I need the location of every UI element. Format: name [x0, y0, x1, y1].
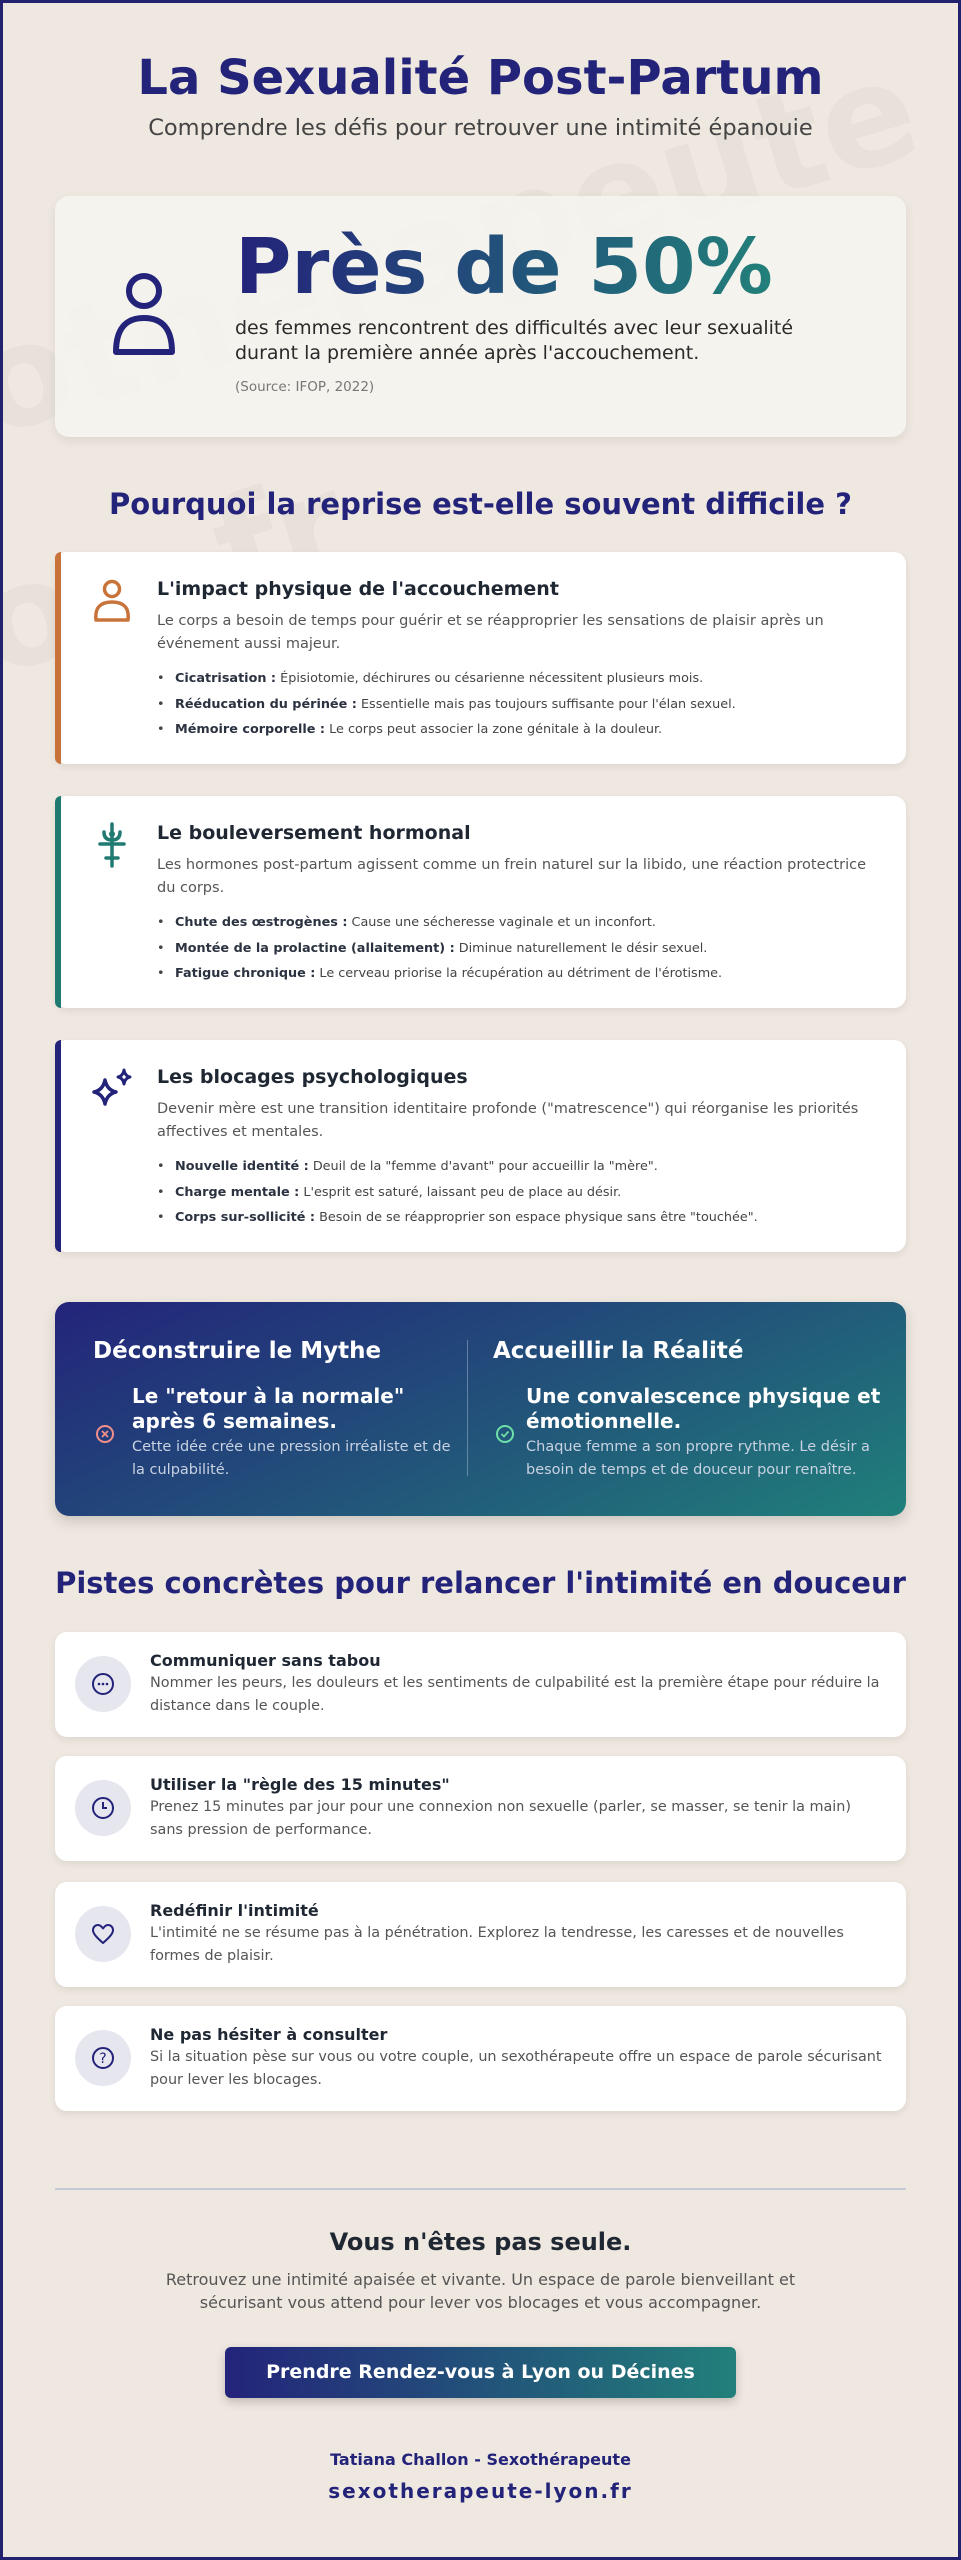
- panel: psychological: Nouvelle identité : Deuil de la "femme d'avant" pour accueillir la "mère".: [175, 1159, 658, 1174]
- CTA button: [225, 2347, 736, 2398]
- panel: physical impact: Rééducation du périnée : Essentielle mais pas toujours suffisante pour l'élan sexuel.: [175, 696, 736, 712]
- reality column: Une convalescence physique et émotionnelle.: [526, 1384, 880, 1433]
- closing text: [166, 2270, 795, 2312]
- panel: hormonal: [55, 796, 906, 1008]
- reality column: Chaque femme a son propre rythme. Le désir a besoin de temps et de douceur pour renaître.: [526, 1439, 870, 1478]
- icon: heart: [75, 1906, 131, 1962]
- panel: physical impact: L'impact physique de l'accouchement: [157, 578, 559, 600]
- panel: physical impact: [55, 552, 906, 764]
- icon: person: [113, 273, 175, 355]
- panel: hormonal: Montée de la prolactine (allaitement) : Diminue naturellement le désir sexuel.: [175, 940, 707, 956]
- panel: hormonal: Fatigue chronique : Le cerveau priorise la récupération au détriment de l'érotisme.: [175, 966, 722, 981]
- watermark: [0, 0, 961, 805]
- tip: 15 minutes: [55, 1756, 906, 1861]
- section heading: tips: Pistes concrètes pour relancer l'intimité en douceur: [55, 1566, 906, 1600]
- stat description: [235, 317, 793, 364]
- panel: hormonal: Chute des œstrogènes : Cause une sécheresse vaginale et un inconfort.: [175, 915, 656, 930]
- icon: chat: [75, 1656, 131, 1712]
- stat description: des femmes rencontrent des difficultés avec leur sexualité: [235, 317, 793, 339]
- reality column: [493, 1338, 880, 1478]
- reality column: Accueillir la Réalité: [493, 1338, 744, 1364]
- panel: physical impact: Cicatrisation : Épisiotomie, déchirures ou césarienne nécessitent plusieurs mois.: [175, 671, 703, 686]
- tip: communicate: Nommer les peurs, les douleurs et les sentiments de culpabilité est la première étape pour réduire la distance dans le couple.: [150, 1675, 879, 1714]
- panel: psychological: Charge mentale : L'esprit est saturé, laissant peu de place au désir.: [175, 1184, 621, 1200]
- myth column: Déconstruire le Mythe: [93, 1338, 381, 1364]
- myth column: après 6 semaines.: [132, 1409, 337, 1433]
- tip: 15 minutes: Prenez 15 minutes par jour pour une connexion non sexuelle (parler, se masser, se tenir la main) sans pression de performance.: [150, 1799, 851, 1838]
- stat panel: [55, 196, 906, 437]
- panel: hormonal: Les hormones post-partum agissent comme un frein naturel sur la libido, une réaction protectrice du corps.: [157, 857, 866, 896]
- panel: psychological: Corps sur-sollicité : Besoin de se réapproprier son espace physique sans être "touchée".: [175, 1210, 758, 1225]
- myth column: [93, 1338, 451, 1478]
- panel: psychological: Les blocages psychologiques: [157, 1066, 468, 1088]
- closing heading: Vous n'êtes pas seule.: [330, 2228, 631, 2256]
- icon: sparkles: [92, 1068, 132, 1106]
- icon: check circle: [496, 1425, 514, 1443]
- subtitle: Comprendre les défis pour retrouver une intimité épanouie: [148, 115, 813, 141]
- tip: redefine intimacy: Redéfinir l'intimité: [150, 1901, 319, 1920]
- stat description: durant la première année après l'accouchement.: [235, 342, 699, 364]
- icon: hormone symbol: [98, 822, 126, 868]
- icon: person orange: [94, 580, 130, 622]
- tip: consult: Si la situation pèse sur vous ou votre couple, un sexothérapeute offre un espace de parole sécurisant pour lever les blocages.: [150, 2049, 882, 2088]
- panel: psychological: [55, 1040, 906, 1252]
- panel: psychological: Devenir mère est une transition identitaire profonde ("matrescence") qui réorganise les priorités affectives et mentales.: [157, 1101, 858, 1140]
- icon: question: ?: [99, 2051, 107, 2067]
- tip: communicate: Communiquer sans tabou: [150, 1651, 381, 1670]
- tip: redefine intimacy: [55, 1882, 906, 1987]
- panel: physical impact: Le corps a besoin de temps pour guérir et se réapproprier les sensations de plaisir après un événement aussi majeur.: [157, 613, 824, 652]
- myth column: Le "retour à la normale": [132, 1384, 404, 1408]
- icon: question: [75, 2030, 131, 2086]
- closing text: sécurisant vous attend pour lever vos blocages et vous accompagner.: [200, 2293, 761, 2312]
- footer name: Tatiana Challon - Sexothérapeute: [330, 2450, 631, 2469]
- panel: physical impact: Mémoire corporelle : Le corps peut associer la zone génitale à la douleur.: [175, 722, 662, 737]
- icon: clock: [75, 1780, 131, 1836]
- tip: 15 minutes: Utiliser la "règle des 15 minutes": [150, 1775, 450, 1794]
- icon: cross circle: [96, 1425, 114, 1443]
- tip: redefine intimacy: L'intimité ne se résume pas à la pénétration. Explorez la tendresse, les caresses et de nouvelles formes de plaisir.: [150, 1925, 844, 1964]
- big stat: Près de 50%: [235, 223, 773, 312]
- myth column: Cette idée crée une pression irréaliste et de la culpabilité.: [132, 1439, 451, 1478]
- source: (Source: IFOP, 2022): [235, 379, 374, 395]
- section heading: why: Pourquoi la reprise est-elle souvent difficile ?: [109, 487, 852, 521]
- tip: consult: Ne pas hésiter à consulter: [150, 2025, 387, 2044]
- closing text: Retrouvez une intimité apaisée et vivante. Un espace de parole bienveillant et: [166, 2270, 795, 2289]
- tip: consult: [55, 2006, 906, 2111]
- tip: communicate: [55, 1632, 906, 1737]
- panel: myth vs reality: [55, 1302, 906, 1516]
- title: La Sexualité Post-Partum: [137, 50, 824, 106]
- footer url: sexotherapeute-lyon.fr: [328, 2479, 633, 2503]
- panel: hormonal: Le bouleversement hormonal: [157, 822, 471, 844]
- CTA button: Prendre Rendez-vous à Lyon ou Décines: [266, 2361, 695, 2383]
